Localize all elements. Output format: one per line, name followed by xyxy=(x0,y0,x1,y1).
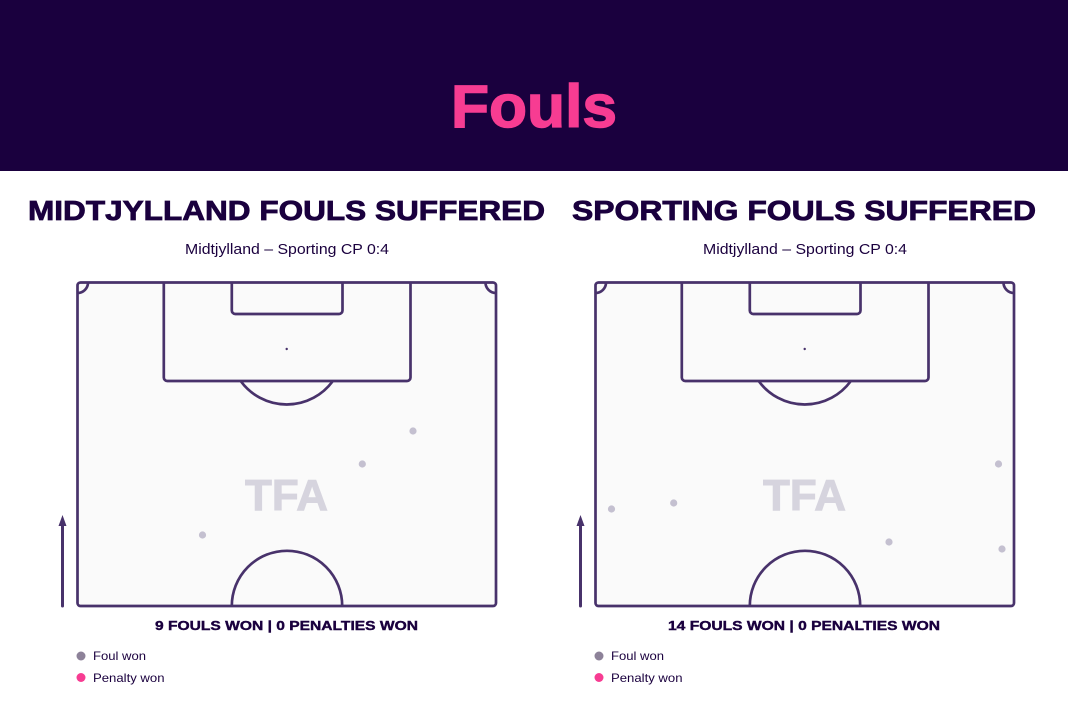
legend: Penalty won xyxy=(611,671,682,685)
foul markers xyxy=(199,427,417,539)
watermark: TFA: TFA xyxy=(245,471,328,520)
heading: MIDTJYLLAND FOULS SUFFERED xyxy=(28,195,545,226)
foul markers xyxy=(608,460,1006,553)
arrow: attacking direction xyxy=(58,515,66,606)
fouls summary: 14 FOULS WON | 0 PENALTIES WON xyxy=(668,618,940,633)
legend: Penalty won xyxy=(93,671,164,685)
heading: SPORTING FOULS SUFFERED xyxy=(572,195,1036,226)
legend xyxy=(76,649,164,685)
match subtitle: Midtjylland – Sporting CP 0:4 xyxy=(703,241,907,258)
legend xyxy=(594,649,682,685)
watermark: TFA: TFA xyxy=(763,471,846,520)
pitch xyxy=(596,282,1014,606)
panel: Sporting fouls suffered xyxy=(572,195,1036,685)
arrow: attacking direction xyxy=(576,515,584,606)
legend: Foul won xyxy=(93,649,146,663)
legend: Foul won xyxy=(611,649,664,663)
pitch xyxy=(78,282,496,606)
header band xyxy=(0,0,1068,171)
title: Fouls xyxy=(451,73,617,140)
panel: Midtjylland fouls suffered xyxy=(28,195,545,685)
fouls summary: 9 FOULS WON | 0 PENALTIES WON xyxy=(155,618,418,633)
match subtitle: Midtjylland – Sporting CP 0:4 xyxy=(185,241,389,258)
